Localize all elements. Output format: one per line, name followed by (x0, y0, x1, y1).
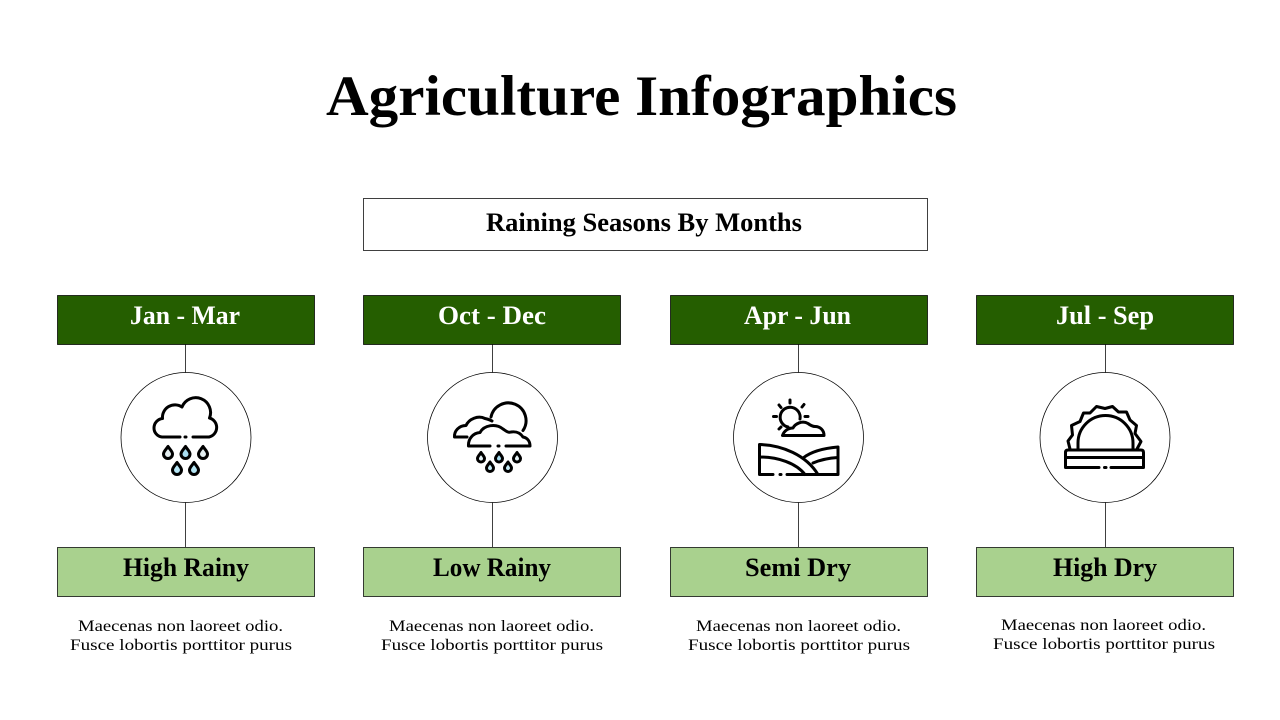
header: Jul - Sep: Jul - Sep (1056, 301, 1154, 330)
icon: sun on the horizon (1040, 372, 1170, 502)
label: Low Rainy (364, 548, 620, 596)
header: Apr - Jun (670, 296, 928, 344)
header: Apr - Jun: Apr - Jun (744, 301, 852, 330)
description 2: Maecenas non laoreet odio. (389, 618, 594, 635)
subtitle box: Raining Seasons By Months (486, 208, 802, 237)
subtitle box (364, 198, 928, 250)
label: Semi Dry (670, 548, 928, 596)
description 3 (688, 618, 910, 654)
description 3: Maecenas non laoreet odio. (696, 618, 901, 635)
title: Agriculture Infographics (326, 65, 957, 128)
header: Jan - Mar: Jan - Mar (130, 301, 240, 330)
column: Apr - Jun (670, 296, 928, 654)
label: Semi Dry: Semi Dry (745, 553, 851, 582)
label: Low Rainy: Low Rainy (433, 553, 551, 582)
column: Jan - Mar (58, 296, 314, 654)
description 3: Fusce lobortis porttitor purus (688, 637, 910, 654)
label: High Rainy: High Rainy (123, 553, 249, 582)
header: Jan - Mar (58, 296, 314, 344)
header: Jul - Sep (976, 296, 1234, 344)
description 1 (70, 618, 292, 654)
description 4 (993, 617, 1215, 653)
description 2: Fusce lobortis porttitor purus (381, 637, 603, 654)
column: Oct - Dec (364, 296, 620, 654)
icon: sun behind clouds with rain (428, 372, 558, 502)
icon: sun over fields (734, 372, 864, 502)
header: Oct - Dec: Oct - Dec (438, 301, 546, 330)
column: Jul - Sep (976, 296, 1234, 653)
description 1: Fusce lobortis porttitor purus (70, 637, 292, 654)
icon: rain cloud (121, 372, 251, 502)
label: High Rainy (58, 548, 314, 596)
label: High Dry (976, 548, 1234, 596)
description 2 (381, 618, 603, 654)
label: High Dry: High Dry (1053, 553, 1157, 582)
description 4: Fusce lobortis porttitor purus (993, 636, 1215, 653)
header: Oct - Dec (364, 296, 620, 344)
description 1: Maecenas non laoreet odio. (78, 618, 283, 635)
description 4: Maecenas non laoreet odio. (1001, 617, 1206, 634)
